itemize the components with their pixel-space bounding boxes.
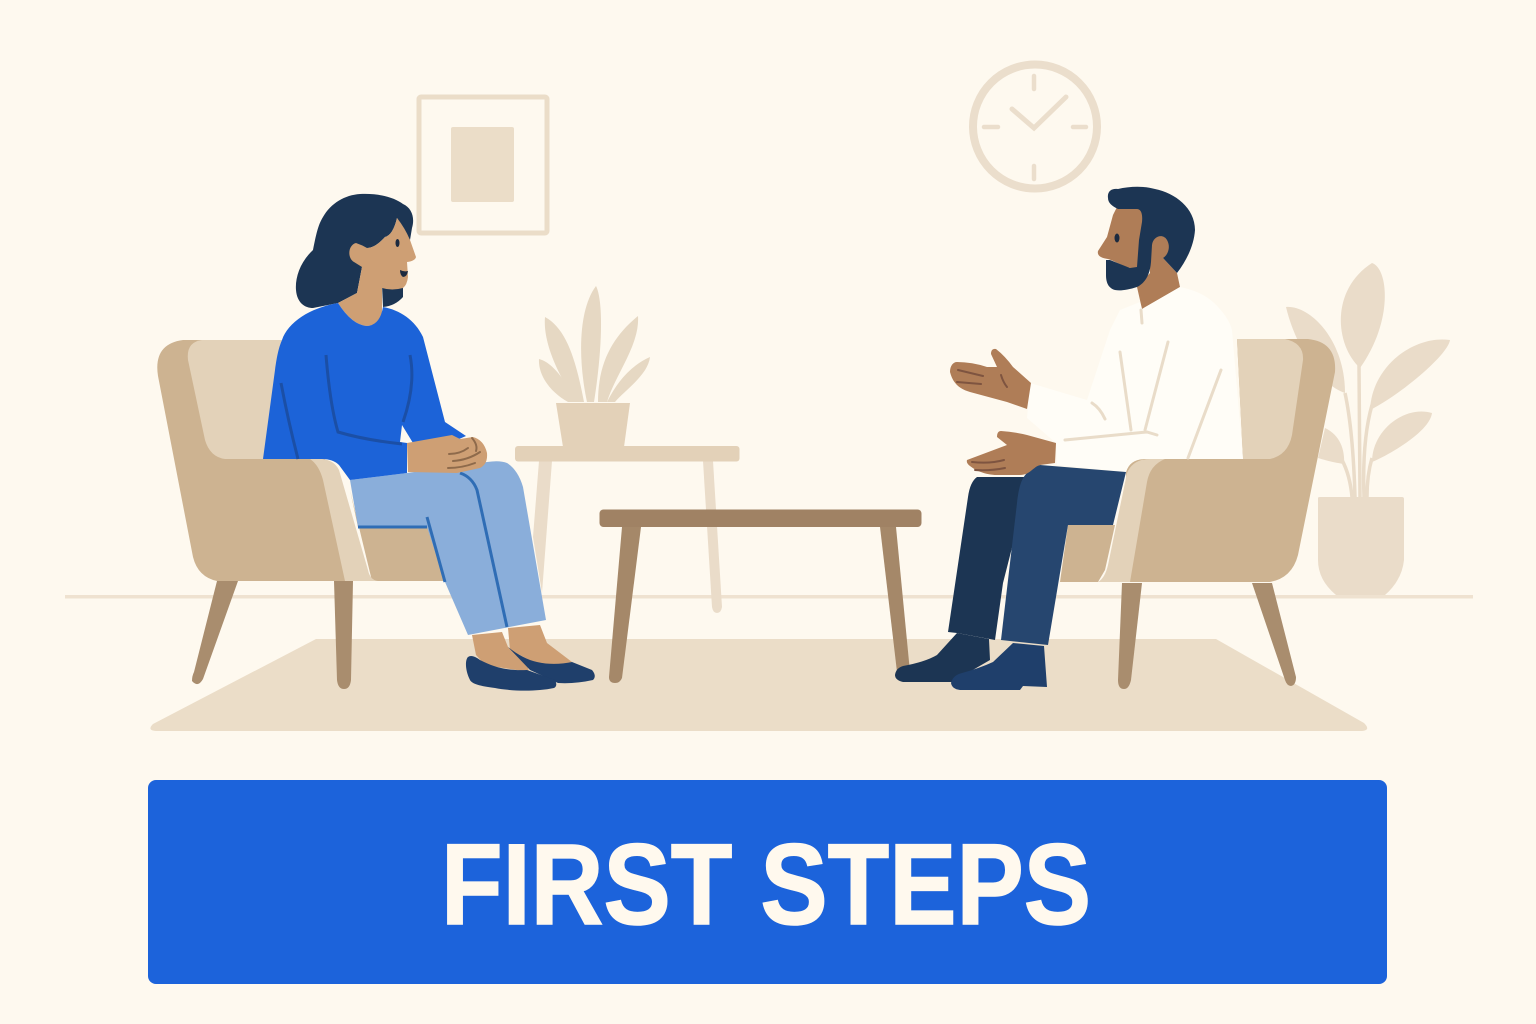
hair: [296, 194, 413, 308]
face and neck: [338, 218, 416, 326]
floor line: [65, 595, 1473, 598]
lower hand: [967, 431, 1056, 475]
chin hair: [382, 285, 403, 307]
coffee table: [600, 510, 922, 683]
large plant: [1286, 263, 1450, 595]
man in white shirt: [895, 187, 1243, 690]
icon: wall clock: [973, 64, 1097, 188]
armchair: left: [157, 340, 445, 689]
clasped hands: [407, 435, 487, 473]
back boot: [895, 633, 990, 682]
eye: [1114, 234, 1120, 242]
side table: [515, 446, 740, 613]
shoes: [466, 647, 595, 691]
shirt: [1027, 287, 1243, 472]
front boot: [951, 643, 1047, 690]
sweater fold lines: [281, 355, 412, 459]
small potted plant: [539, 286, 650, 447]
lower legs: [472, 625, 572, 672]
pants: [350, 461, 546, 635]
armchair: right: [1060, 339, 1335, 689]
sweater: [263, 303, 466, 480]
eye: [396, 239, 400, 247]
banner: [148, 780, 1387, 984]
shirt fold lines: [1065, 310, 1221, 458]
front trouser leg: [1001, 465, 1126, 645]
face: [1098, 207, 1148, 270]
woman in blue sweater: [263, 194, 595, 691]
ear: [1152, 236, 1169, 258]
mouth: [400, 270, 408, 277]
wall picture frame: [419, 97, 547, 233]
back trouser leg: [948, 477, 1030, 640]
upper hand: [950, 349, 1031, 409]
neck: [1137, 243, 1180, 309]
pants seams: [358, 473, 507, 627]
title: FIRST STEPS: [441, 821, 1091, 949]
rug: [150, 639, 1367, 731]
hair and beard: [1106, 187, 1195, 290]
